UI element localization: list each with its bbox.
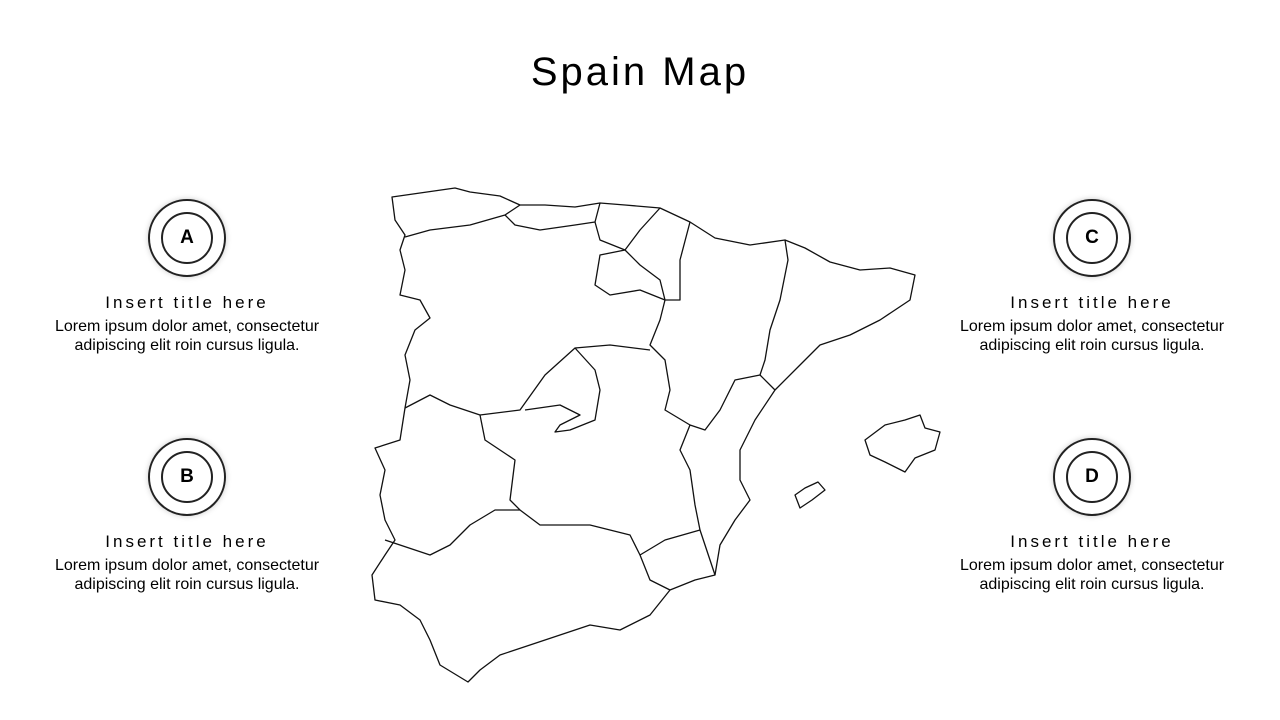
icon: circle B: B bbox=[180, 466, 194, 487]
icon: circle B bbox=[148, 438, 226, 516]
text D: Lorem ipsum dolor amet, consectetur bbox=[960, 557, 1224, 574]
block A bbox=[55, 196, 319, 354]
text D: adipiscing elit roin cursus ligula. bbox=[980, 576, 1204, 593]
icon: circle C: C bbox=[1085, 227, 1099, 248]
island: Ibiza bbox=[795, 482, 825, 508]
heading B: Insert title here bbox=[105, 532, 269, 551]
text D bbox=[960, 557, 1224, 593]
text C: adipiscing elit roin cursus ligula. bbox=[980, 337, 1204, 354]
title: Spain Map bbox=[531, 50, 749, 94]
heading A: Insert title here bbox=[105, 293, 269, 312]
icon: circle D: D bbox=[1085, 466, 1099, 487]
icon: circle D bbox=[1053, 438, 1131, 516]
text B: adipiscing elit roin cursus ligula. bbox=[74, 576, 300, 593]
text B: Lorem ipsum dolor amet, consectetur bbox=[55, 557, 319, 574]
heading D: Insert title here bbox=[1010, 532, 1174, 551]
icon: circle A: A bbox=[180, 227, 194, 248]
text A: adipiscing elit roin cursus ligula. bbox=[74, 337, 300, 354]
text A bbox=[55, 318, 319, 354]
block C bbox=[960, 196, 1224, 354]
text B bbox=[55, 557, 319, 593]
icon: circle A bbox=[148, 199, 226, 277]
text C: Lorem ipsum dolor amet, consectetur bbox=[960, 318, 1224, 335]
block B bbox=[55, 436, 319, 593]
region borders bbox=[385, 203, 788, 590]
icon: circle C bbox=[1053, 199, 1131, 277]
island: Mallorca bbox=[865, 415, 940, 472]
mainland outline bbox=[372, 188, 915, 682]
text C bbox=[960, 318, 1224, 354]
heading C: Insert title here bbox=[1010, 293, 1174, 312]
text A: Lorem ipsum dolor amet, consectetur bbox=[55, 318, 319, 335]
block D bbox=[960, 436, 1224, 593]
